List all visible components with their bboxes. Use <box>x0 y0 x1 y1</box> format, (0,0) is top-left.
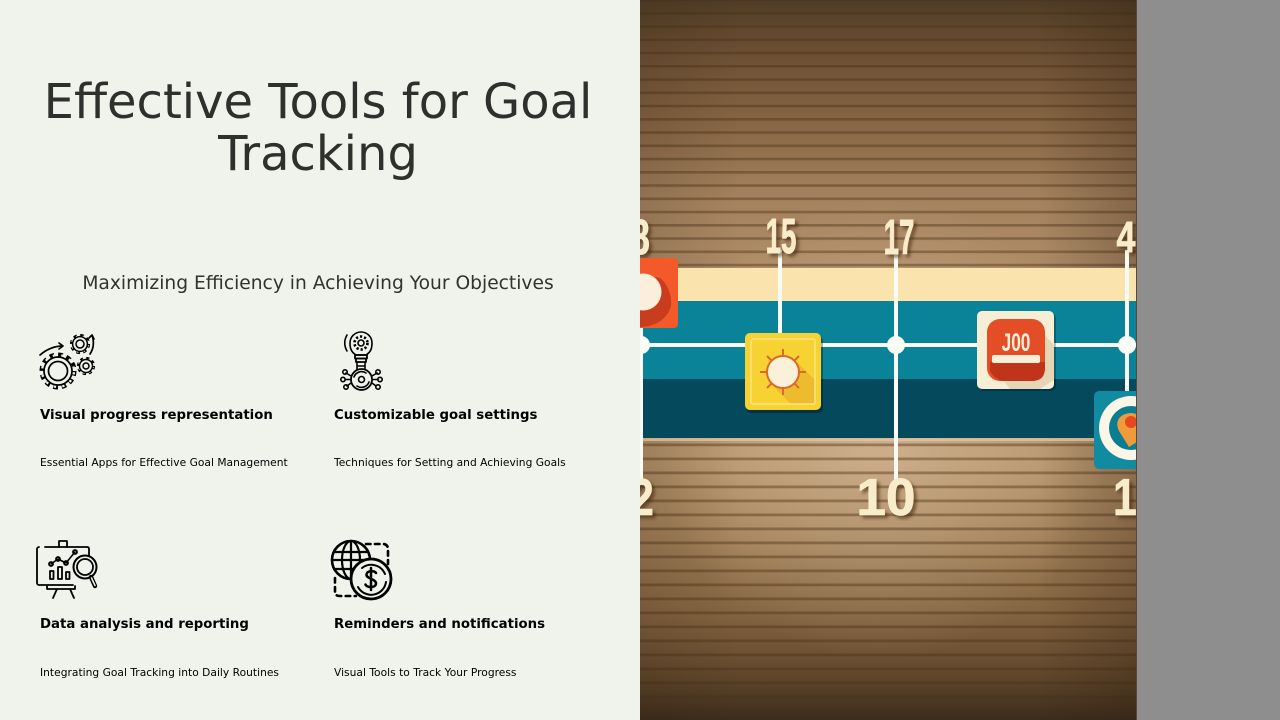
number labels: 17 <box>884 211 914 265</box>
text: daily routines: Integrating Goal Tracking into Daily Routines <box>40 666 279 679</box>
icon tile: red 100 badge <box>977 311 1056 391</box>
subtitle: Maximizing Efficiency in Achieving Your Objectives <box>82 273 554 294</box>
panel: gray margin <box>1137 0 1280 720</box>
colored bands <box>640 268 1136 441</box>
icon tile: orange circle <box>620 258 678 328</box>
number labels: 10 <box>857 470 915 527</box>
image edge <box>1136 0 1137 720</box>
heading: visual progress: Visual progress representation <box>40 408 273 423</box>
icon tile: teal map pin <box>1094 391 1163 469</box>
number labels: 1 <box>1113 469 1137 527</box>
text: goal management: Essential Apps for Effective Goal Management <box>40 456 288 469</box>
panel: text content <box>0 0 640 720</box>
text: setting goals: Techniques for Setting and Achieving Goals <box>334 456 566 469</box>
timeline nodes <box>632 336 1136 354</box>
title: Effective Tools for Goal <box>44 74 592 130</box>
wood background <box>640 0 1137 720</box>
number labels <box>630 210 1137 527</box>
heading: data analysis: Data analysis and reporting <box>40 617 249 632</box>
heading: customizable goals: Customizable goal settings <box>334 408 537 423</box>
icon: globe and dollar coin <box>330 540 392 600</box>
timeline lines <box>640 250 1136 480</box>
heading: reminders: Reminders and notifications <box>334 617 545 632</box>
number labels: 15 <box>766 210 796 264</box>
icon: light bulb with gear and nodes <box>340 331 383 391</box>
icon: presentation board with magnifier <box>36 540 98 599</box>
icon tile: red 100 badge: J00 <box>1002 328 1030 357</box>
panel: timeline illustration on wood <box>640 0 1137 720</box>
icon tile: yellow sun <box>745 333 823 413</box>
text: visual tools: Visual Tools to Track Your Progress <box>334 666 516 679</box>
title: Tracking <box>218 126 418 182</box>
title <box>44 74 592 182</box>
icon: gears with arrows <box>39 334 96 390</box>
number labels: 4 <box>1117 213 1136 262</box>
